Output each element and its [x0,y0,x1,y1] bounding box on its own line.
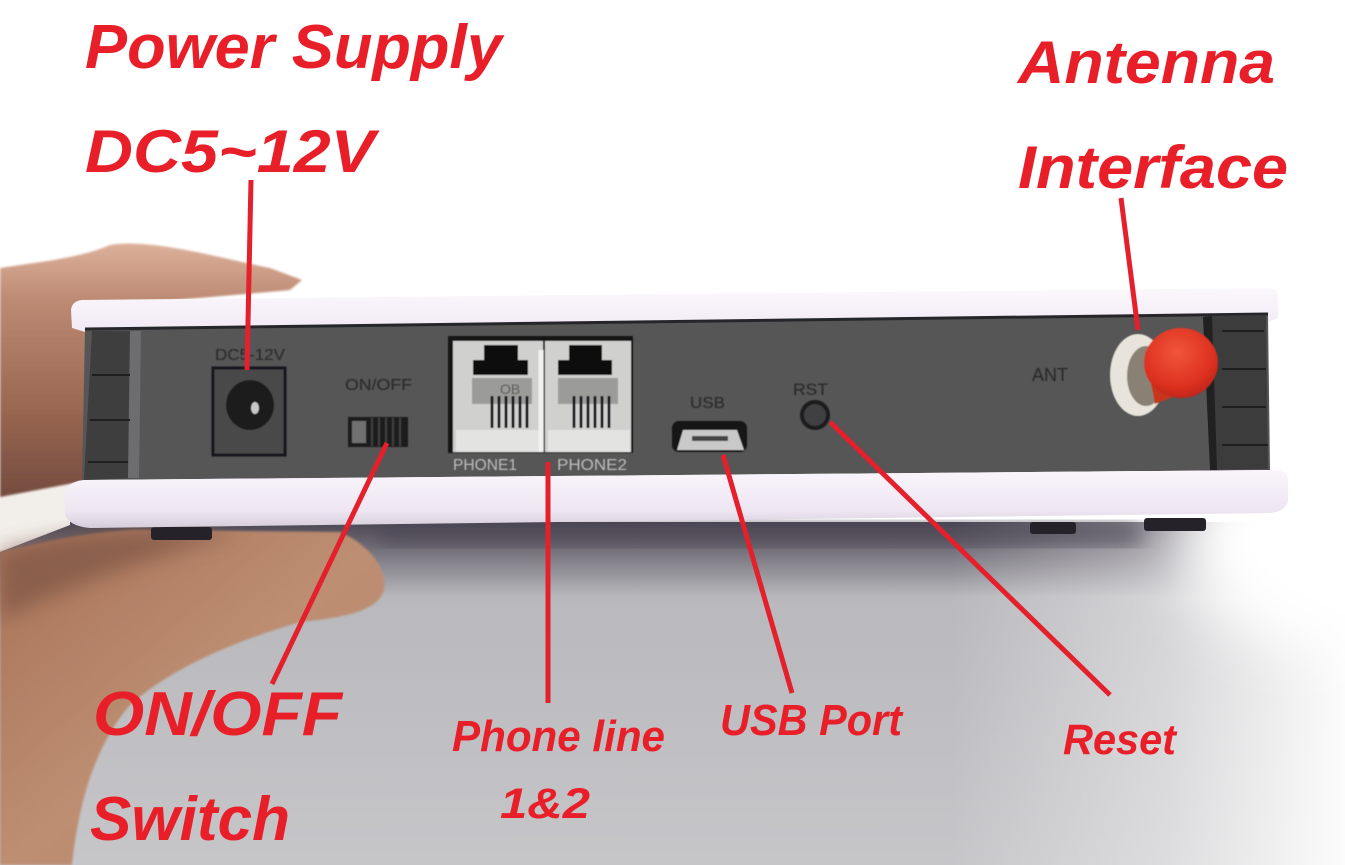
label: ON/OFF: ON/OFF [345,377,412,394]
right rubber feet [1030,522,1076,534]
heading: DC5~12V: DC5~12V [85,118,381,185]
left ribbed grip [84,331,141,480]
heading: Switch: Switch [90,785,290,854]
label: PHONE2: PHONE2 [557,457,627,474]
pointer: phone lines [546,462,550,703]
port: micro USB [672,395,747,452]
top white casing band [71,288,1278,332]
phone jack 2 [545,341,631,452]
bottom white casing band [64,470,1288,528]
heading: Power Supply: Power Supply [85,13,506,82]
label: 1&2: 1&2 [500,780,590,828]
dark rear panel [82,315,1270,480]
port: dual phone jacks [448,336,633,474]
pointer: power supply [247,180,251,370]
device body [64,288,1288,546]
port: DC power jack [213,347,285,455]
heading: ON/OFF: ON/OFF [93,680,344,749]
label: Phone line: Phone line [452,712,665,761]
index finger [0,244,302,497]
phone jack 1 [453,341,543,452]
port: ON/OFF slide switch [345,377,412,447]
hand holding the device [0,244,385,865]
port: antenna connector [1032,328,1218,416]
label: USB: USB [690,395,725,412]
pointer: reset [830,422,1110,695]
gap behind the hand [0,478,70,552]
right ribbed grip [1203,315,1268,470]
label: ANT: ANT [1032,365,1068,385]
port: reset button [793,380,830,430]
pointer: antenna interface [1121,198,1138,330]
thumb shadow [0,530,240,620]
thumb [0,530,385,865]
label: PHONE1: PHONE1 [453,457,517,474]
table shadow [380,522,1140,546]
pointer: on/off switch [272,443,387,684]
label: Reset: Reset [1063,716,1178,764]
pointer: USB port [723,455,792,693]
heading: Interface: Interface [1018,134,1288,201]
left rubber foot [151,527,212,540]
phone jack 1: OB [500,381,520,397]
label: DC5-12V: DC5-12V [215,347,285,364]
label: RST: RST [793,380,828,399]
label: USB Port: USB Port [720,696,904,745]
heading: Antenna: Antenna [1016,29,1275,96]
